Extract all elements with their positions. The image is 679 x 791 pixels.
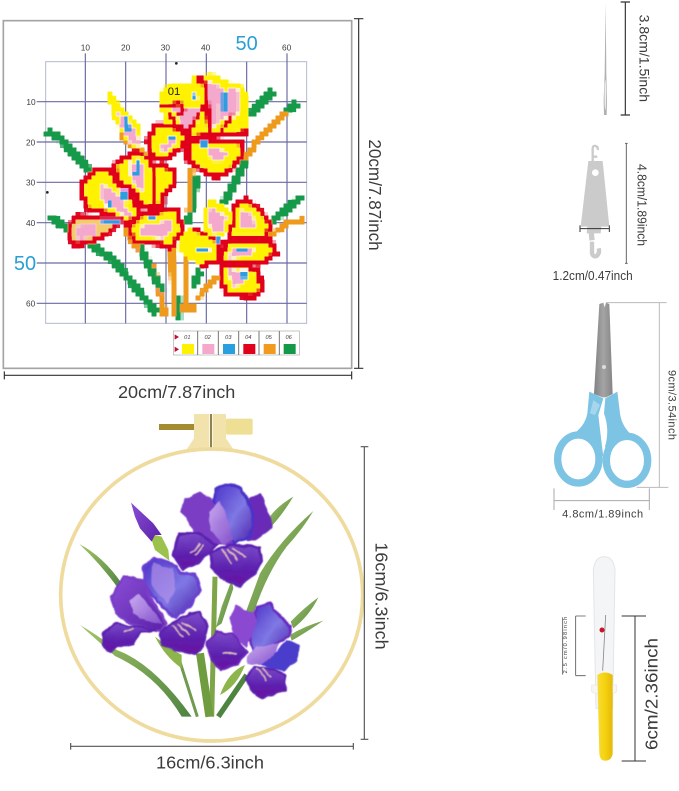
chart axis numbers: 10 [81, 43, 90, 53]
chart axis numbers: 20 [121, 43, 131, 53]
panel: embroidery hoop with iris [61, 414, 392, 772]
dimension: chart height: 20cm/7.87inch [365, 139, 385, 251]
dimension: hoop height [361, 447, 392, 739]
left iris [103, 558, 208, 654]
iris leaves and stems [79, 497, 323, 717]
chart axis numbers [26, 43, 292, 309]
blue 50 labels: 50 [236, 33, 258, 55]
dimension: hoop height: 16cm/6.3inch [372, 542, 392, 650]
hoop screw [159, 419, 253, 435]
dimension: blade length: 2.5 cm/0.98inch [563, 617, 569, 673]
dimension: threader length [625, 143, 648, 263]
dimension: needle length: 3.8cm/1.5inch [636, 15, 652, 102]
right iris [207, 603, 298, 697]
icon: seam ripper [592, 557, 617, 761]
blue 50 labels [14, 33, 258, 275]
colour legend [173, 331, 299, 355]
panel: seam ripper [563, 557, 662, 761]
right flower [203, 198, 233, 240]
icon: needle threader [581, 146, 609, 256]
dimension: scissors height: 9cm/3.54inch [665, 370, 677, 440]
pixel flower artwork [47, 74, 303, 318]
hoop clasp [187, 414, 235, 452]
icon: scissors [558, 303, 648, 484]
dimension: needle length [621, 2, 652, 115]
panel: scissors [554, 303, 677, 520]
hoop ring [61, 449, 363, 741]
chart axis numbers: 40 [26, 218, 36, 228]
chart axis numbers: 30 [26, 178, 36, 188]
icon: needle [604, 3, 607, 115]
dimension: chart width [4, 371, 352, 402]
dimension: scissors width: 4.8cm/1.89inch [562, 508, 643, 520]
top iris [173, 483, 271, 586]
middle left flower [147, 165, 175, 207]
colour legend: 05 [266, 335, 273, 341]
dimension: chart width: 20cm/7.87inch [118, 382, 235, 402]
chart frame [3, 21, 352, 368]
label 01: 01 [168, 86, 180, 98]
panel: cross-stitch chart [3, 19, 385, 402]
colour legend: 04 [245, 335, 251, 341]
dimension: scissors width [554, 488, 649, 520]
blue accents [102, 90, 248, 278]
dimension: chart height [354, 19, 385, 368]
dimension: ripper length [622, 616, 662, 761]
dimension: threader width [553, 225, 633, 283]
chart axis numbers: 20 [26, 137, 36, 147]
chart axis numbers: 40 [201, 43, 211, 53]
colour legend: 06 [286, 335, 293, 341]
chart grid [37, 53, 307, 323]
panel: needle [553, 2, 652, 283]
blue 50 labels: 50 [14, 253, 36, 275]
chart axis numbers: 60 [26, 299, 36, 309]
chart axis numbers: 10 [26, 97, 36, 107]
chart axis numbers: 30 [161, 43, 170, 53]
dimension: blade length [563, 616, 586, 676]
top flower [160, 74, 247, 135]
colour legend: 01 [184, 335, 190, 341]
dimension: ripper length: 6cm/2.36inch [642, 638, 662, 750]
dimension: hoop width: 16cm/6.3inch [156, 752, 264, 772]
dimension: hoop width [71, 743, 353, 772]
iris bud [131, 503, 169, 561]
stray marks [46, 62, 178, 194]
dimension: scissors height [606, 303, 677, 487]
dimension: threader length: 4.8cm/1.89inch [634, 164, 648, 246]
dimension: threader width: 1.2cm/0.47inch [553, 269, 633, 283]
colour legend: 03 [225, 335, 232, 341]
chart axis numbers: 60 [282, 43, 292, 53]
colour legend: 02 [205, 335, 212, 341]
